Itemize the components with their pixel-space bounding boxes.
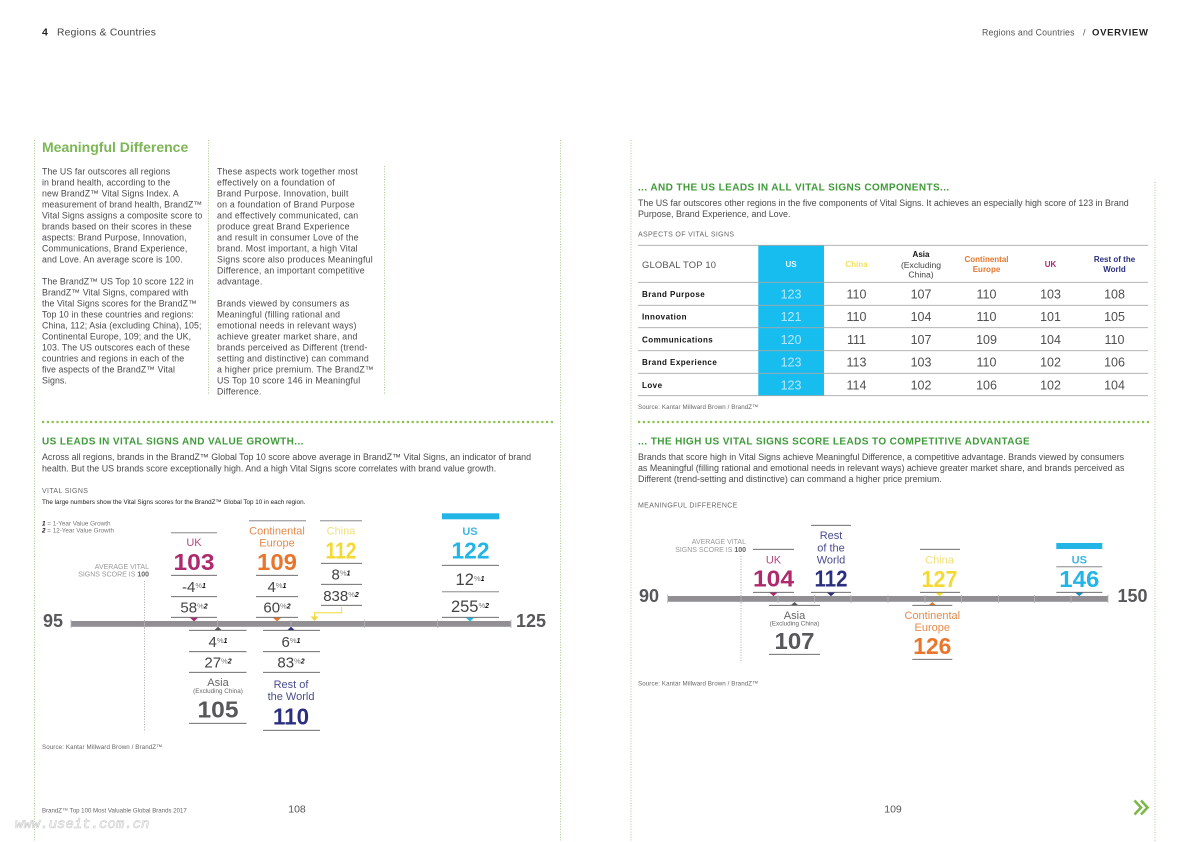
heading: competitive advantage: ... THE HIGH US VITAL SIGNS SCORE LEADS TO COMPETITIVE ADVANTAGE bbox=[638, 436, 1030, 448]
row: Brand Purpose: 110 bbox=[977, 288, 997, 302]
region: Asia: 2 bbox=[227, 658, 232, 666]
table header row: Rest of the bbox=[1094, 255, 1136, 264]
region: US: 146 bbox=[1059, 566, 1099, 592]
region: UK: 2 bbox=[203, 604, 208, 610]
text block: intro column 1: China, 112; Asia (excluding China), 105; bbox=[42, 321, 202, 331]
row: Brand Experience: Brand Experience bbox=[642, 358, 717, 367]
region: Continental Europe: 2 bbox=[286, 604, 291, 610]
row: Innovation: 101 bbox=[1040, 310, 1061, 324]
region: UK: 104 bbox=[753, 566, 794, 592]
row: Love: 106 bbox=[976, 378, 997, 392]
text block: intro column 1: new BrandZ™ Vital Signs Index. A bbox=[42, 189, 179, 199]
text block: intro column 1: Vital Signs assigns a composite score to bbox=[42, 211, 203, 221]
text block: vital signs intro: health. But the US brands score exceptionally high. And a high Vital Signs score correlates with brand value growth. bbox=[42, 464, 496, 474]
callout: average score 100 bbox=[78, 564, 149, 732]
table header row: US bbox=[785, 260, 797, 269]
text block: intro column 2: and result in consumer Love of the bbox=[217, 233, 359, 243]
page header left: Regions & Countries bbox=[57, 28, 156, 38]
region: Continental Europe: Continental bbox=[904, 610, 960, 622]
text block: intro column 1: The US far outscores all regions bbox=[42, 167, 171, 177]
region: China: 838 bbox=[323, 588, 348, 605]
text block: competitive advantage intro: Brands that score high in Vital Signs achieve Meaningful Difference, a competitive advantage. Brands viewed by consumers bbox=[638, 452, 1125, 462]
callout: average score 100: AVERAGE VITAL bbox=[95, 564, 149, 571]
region: UK bbox=[171, 533, 217, 622]
region: US: 122 bbox=[452, 537, 490, 563]
row: Brand Purpose: 123 bbox=[781, 288, 801, 302]
text block: intro column 2: Signs score also produces Meaningful bbox=[217, 255, 373, 265]
region: China bbox=[310, 521, 362, 621]
page header right: / bbox=[1083, 28, 1086, 38]
region: US: 255 bbox=[451, 598, 478, 616]
region: Asia: 27 bbox=[204, 654, 221, 672]
chart: vital signs timeline bbox=[43, 513, 546, 732]
row: Brand Purpose: 103 bbox=[1040, 288, 1061, 302]
region: UK: % bbox=[197, 602, 204, 610]
page header right: OVERVIEW bbox=[1092, 28, 1149, 38]
row: Communications: 111 bbox=[847, 333, 866, 347]
text block: intro column 2: on a foundation of Brand Purpose bbox=[217, 200, 355, 210]
heading: US leads in all components: ... AND THE US LEADS IN ALL VITAL SIGNS COMPONENTS... bbox=[638, 182, 950, 194]
text block: intro column 1: The BrandZ™ US Top 10 score 122 in bbox=[42, 277, 194, 287]
region: Rest of the World: of the bbox=[817, 542, 845, 554]
text block: intro column 2: effectively on a foundation of bbox=[217, 178, 335, 188]
text block: vital signs intro: Across all regions, brands in the BrandZ™ Global Top 10 score above average in BrandZ™ Vital Signs, an indicator of brand bbox=[42, 452, 531, 462]
region: Continental Europe bbox=[249, 521, 306, 622]
region: US: 12 bbox=[456, 571, 474, 589]
region: US: % bbox=[474, 574, 481, 583]
region: Rest of the World: 112 bbox=[814, 566, 848, 592]
region: Continental Europe: 126 bbox=[913, 633, 951, 659]
region: Asia: Asia bbox=[784, 610, 806, 622]
page header right: Regions and Countries bbox=[982, 28, 1075, 38]
text block: intro column 1: Communications, Brand Experience, bbox=[42, 244, 187, 254]
region: UK: 103 bbox=[174, 549, 214, 575]
region: Rest of the World bbox=[811, 525, 851, 596]
text block: intro column 1: Top 10 in these countries and regions: bbox=[42, 310, 194, 320]
region: Rest of the World: World bbox=[817, 554, 845, 566]
text block: intro column 2: These aspects work together most bbox=[217, 167, 358, 177]
region: China: % bbox=[340, 568, 347, 578]
region: China: China bbox=[327, 526, 356, 538]
row: Innovation: 110 bbox=[977, 310, 997, 324]
row: Innovation: 105 bbox=[1104, 310, 1125, 324]
region: UK: % bbox=[195, 581, 202, 590]
callout: average score 100: SIGNS SCORE IS 100 bbox=[78, 572, 149, 579]
row: Love: 123 bbox=[781, 378, 801, 392]
region: Continental Europe: % bbox=[280, 602, 287, 610]
callout: average score 100 bbox=[675, 539, 746, 663]
region: Rest of the World: % bbox=[294, 656, 301, 666]
legend: growth keys: 1 = 1-Year Value Growth bbox=[42, 520, 111, 528]
region: UK: -4 bbox=[182, 579, 195, 596]
region: UK: UK bbox=[186, 537, 202, 549]
text block: intro column 2: emotional needs in relevant ways) bbox=[217, 321, 357, 331]
text block: intro column 2: Brands viewed by consumers as bbox=[217, 299, 350, 309]
region: UK: 58 bbox=[180, 600, 197, 616]
text block: intro column 2: Difference, an important competitive bbox=[217, 266, 365, 276]
text block: intro column 2: setting and distinctive) can command bbox=[217, 354, 369, 364]
row: Innovation: Innovation bbox=[642, 313, 687, 322]
text block: intro column 1: countries and regions in each of the bbox=[42, 354, 184, 364]
region: China: 127 bbox=[922, 566, 958, 592]
callout: average score 100: AVERAGE VITAL bbox=[692, 539, 746, 546]
row: Brand Purpose: 108 bbox=[1104, 288, 1125, 302]
row: Communications: 104 bbox=[1040, 333, 1061, 347]
text block: competitive advantage intro: Different (trend-setting and distinctive) can command a higher price premium. bbox=[638, 474, 942, 484]
page number 108: 108 bbox=[288, 804, 306, 816]
text block: intro column 1: the Vital Signs scores for the BrandZ™ bbox=[42, 299, 197, 309]
row: Brand Experience: 110 bbox=[977, 356, 997, 370]
page number 109: 109 bbox=[884, 804, 902, 816]
region: China: 1 bbox=[347, 570, 351, 578]
watermark: www.useit.com.cn bbox=[15, 817, 149, 833]
region: Asia: 4 bbox=[209, 634, 217, 651]
row: Brand Purpose: 107 bbox=[911, 288, 931, 302]
text block: intro column 1: brands based on their scores in these bbox=[42, 222, 192, 232]
row: Communications: 120 bbox=[781, 333, 801, 347]
row: Love: 102 bbox=[911, 378, 931, 392]
row: Communications bbox=[642, 333, 1125, 347]
region: Asia: % bbox=[217, 636, 224, 645]
region: China: 8 bbox=[332, 566, 340, 584]
source: vital signs chart: Source: Kantar Millward Brown / BrandZ™ bbox=[42, 744, 162, 751]
region: Continental Europe: Europe bbox=[915, 622, 950, 634]
text block: intro column 1: Continental Europe, 109; and the UK, bbox=[42, 332, 191, 342]
region: China: 112 bbox=[326, 537, 356, 563]
region: Rest of the World: % bbox=[290, 636, 297, 645]
region: Continental Europe: 1 bbox=[283, 583, 287, 590]
callout: average score 100: SIGNS SCORE IS 100 bbox=[675, 547, 746, 554]
region: Rest of the World: 83 bbox=[277, 654, 294, 672]
text block: intro column 1: aspects: Brand Purpose, Innovation, bbox=[42, 233, 187, 243]
region: Asia: 105 bbox=[198, 696, 239, 722]
text block: intro column 1: and Love. An average score is 100. bbox=[42, 255, 183, 265]
text block: intro column 2: brands perceived as Different (trend- bbox=[217, 343, 368, 353]
region: Asia: % bbox=[221, 656, 228, 666]
axis: 90 to 150: 90 bbox=[639, 586, 659, 606]
region: US bbox=[1056, 543, 1102, 596]
heading: Meaningful Difference: Meaningful Difference bbox=[42, 139, 188, 155]
text block: intro column 2: US Top 10 score 146 in Meaningful bbox=[217, 376, 360, 386]
region: China: 2 bbox=[354, 592, 359, 599]
text block: components intro: Purpose, Brand Experience, and Love. bbox=[638, 209, 790, 219]
row: Communications: 109 bbox=[976, 333, 997, 347]
text block: intro column 1: in brand health, according to the bbox=[42, 178, 170, 188]
text block: intro column 2: brand. Most important, a high Vital bbox=[217, 244, 358, 254]
legend: growth keys bbox=[41, 520, 114, 534]
row: Innovation bbox=[642, 310, 1125, 324]
region: Rest of the World: 110 bbox=[273, 703, 309, 729]
row: Brand Experience: 102 bbox=[1040, 356, 1061, 370]
row: Love: 114 bbox=[847, 378, 867, 392]
footer: publication title: BrandZ™ Top 100 Most Valuable Global Brands 2017 bbox=[42, 808, 187, 814]
region: China: % bbox=[348, 590, 355, 599]
region: US: % bbox=[478, 601, 485, 610]
region: Asia: 107 bbox=[774, 628, 814, 654]
region: China: China bbox=[925, 554, 955, 566]
region: Rest of the World: Rest of bbox=[274, 679, 309, 691]
region: Asia bbox=[769, 602, 820, 654]
text block: intro column 2: Brand Purpose. Innovation, built bbox=[217, 189, 349, 199]
icon: next page chevrons bbox=[1134, 800, 1148, 814]
region: US: US bbox=[1072, 554, 1087, 566]
text block: intro column 2: a higher price premium. The BrandZ™ bbox=[217, 365, 374, 375]
region: US: US bbox=[462, 526, 478, 538]
table header row bbox=[642, 250, 1136, 280]
region: Continental Europe: 4 bbox=[268, 579, 276, 596]
text block: intro column 1: measurement of brand health, BrandZ™ bbox=[42, 200, 202, 210]
row: Brand Purpose bbox=[642, 288, 1125, 302]
region: US bbox=[442, 513, 499, 622]
table header row: (Excluding bbox=[901, 260, 941, 270]
region: Rest of the World: 6 bbox=[282, 634, 290, 651]
text block: intro column 1: Signs. bbox=[42, 376, 67, 386]
row: Communications: 110 bbox=[1105, 333, 1125, 347]
row: Brand Purpose: 110 bbox=[847, 288, 867, 302]
region: Continental Europe: Europe bbox=[259, 538, 295, 550]
source: table: Source: Kantar Millward Brown / BrandZ™ bbox=[638, 404, 758, 411]
table: aspects of vital signs bbox=[638, 245, 1148, 396]
region: US: 2 bbox=[484, 603, 489, 610]
row: Innovation: 121 bbox=[781, 310, 801, 324]
row: Love bbox=[642, 378, 1125, 392]
table header row: Asia bbox=[913, 250, 930, 259]
region: US: 1 bbox=[481, 576, 485, 583]
region: Asia: (Excluding China) bbox=[770, 620, 819, 627]
region: Asia: 1 bbox=[224, 638, 228, 645]
table header row: China bbox=[845, 260, 868, 269]
region: Rest of the World: Rest bbox=[820, 530, 842, 542]
region: Continental Europe: Continental bbox=[249, 526, 305, 538]
page header left: 4 bbox=[42, 26, 48, 38]
chart: meaningful difference timeline bbox=[639, 525, 1148, 663]
region: Continental Europe: 60 bbox=[263, 600, 280, 616]
row: Love: Love bbox=[642, 381, 663, 390]
region: Asia bbox=[189, 627, 246, 723]
row: Love: 102 bbox=[1040, 378, 1061, 392]
row: Innovation: 104 bbox=[911, 310, 931, 324]
row: Communications: 107 bbox=[911, 333, 931, 347]
label: meaningful difference: MEANINGFUL DIFFERENCE bbox=[638, 502, 738, 510]
text block: intro column 2: Meaningful (filling rational and bbox=[217, 310, 340, 320]
region: Rest of the World: 2 bbox=[300, 658, 305, 666]
text block: components intro: The US far outscores other regions in the five components of Vital Signs. It achieves an especially high score of 123 in Brand bbox=[638, 198, 1129, 208]
label: aspects of vital signs: ASPECTS OF VITAL SIGNS bbox=[638, 232, 734, 238]
region: China bbox=[920, 549, 960, 596]
region: UK: UK bbox=[766, 554, 782, 566]
table header row: Continental bbox=[964, 255, 1008, 264]
text block: competitive advantage intro: as Meaningful (filling rational and emotional needs in relevant ways) achieve greater market share, and brands perceived as bbox=[638, 463, 1125, 473]
legend: growth keys: 2 = 12-Year Value Growth bbox=[41, 528, 114, 534]
axis: 90 to 150: 150 bbox=[1118, 586, 1148, 606]
region: Asia: Asia bbox=[207, 677, 230, 689]
text block: intro column 2: produce great Brand Experience bbox=[217, 222, 350, 232]
region: Continental Europe bbox=[904, 602, 960, 659]
table header row: World bbox=[1103, 265, 1126, 274]
table header row: China) bbox=[908, 270, 934, 280]
axis: 95 to 125 bbox=[43, 611, 546, 631]
page header right bbox=[982, 28, 1149, 38]
row: Love: 104 bbox=[1104, 378, 1125, 392]
heading: US leads in vital signs: US LEADS IN VITAL SIGNS AND VALUE GROWTH... bbox=[42, 436, 304, 448]
text block: intro column 2: and effectively communicated, can bbox=[217, 211, 358, 221]
table header row: GLOBAL TOP 10 bbox=[642, 259, 716, 270]
region: Rest of the World: the World bbox=[268, 691, 314, 703]
row: Brand Experience bbox=[642, 356, 1125, 370]
row: Brand Experience: 103 bbox=[911, 356, 931, 370]
row: Innovation: 110 bbox=[847, 310, 867, 324]
source: meaningful difference chart: Source: Kantar Millward Brown / BrandZ™ bbox=[638, 680, 758, 688]
axis: 95 to 125: 95 bbox=[43, 611, 63, 631]
row: Communications: Communications bbox=[642, 336, 713, 345]
row: Brand Experience: 106 bbox=[1104, 356, 1125, 370]
text block: intro column 1: 103. The US outscores each of these bbox=[42, 343, 190, 353]
table header row: Europe bbox=[973, 265, 1001, 274]
region: Rest of the World: 1 bbox=[297, 638, 301, 645]
row: Brand Experience: 113 bbox=[847, 356, 867, 370]
text block: intro column 2: Difference. bbox=[217, 387, 262, 397]
row: Brand Experience: 123 bbox=[781, 356, 801, 370]
region: Rest of the World bbox=[263, 627, 320, 730]
region: UK bbox=[753, 549, 794, 596]
axis: 95 to 125: 125 bbox=[516, 611, 546, 631]
text block: intro column 1: five aspects of the BrandZ™ Vital bbox=[42, 365, 175, 375]
note: large numbers: The large numbers show the Vital Signs scores for the BrandZ™ Global Top 10 in each region. bbox=[42, 499, 306, 506]
text block: intro column 2: advantage. bbox=[217, 277, 263, 287]
table header row: UK bbox=[1045, 260, 1056, 269]
text block: intro column 1: BrandZ™ Vital Signs, compared with bbox=[42, 288, 188, 298]
text block: intro column 2: achieve greater market share, and bbox=[217, 332, 358, 342]
label: vital signs: VITAL SIGNS bbox=[42, 488, 88, 495]
region: Continental Europe: 109 bbox=[257, 549, 297, 575]
region: Asia: (Excluding China) bbox=[193, 688, 243, 695]
region: UK: 1 bbox=[202, 583, 206, 590]
axis: 90 to 150 bbox=[639, 586, 1148, 606]
region: Continental Europe: % bbox=[276, 581, 283, 590]
row: Brand Purpose: Brand Purpose bbox=[642, 290, 705, 299]
